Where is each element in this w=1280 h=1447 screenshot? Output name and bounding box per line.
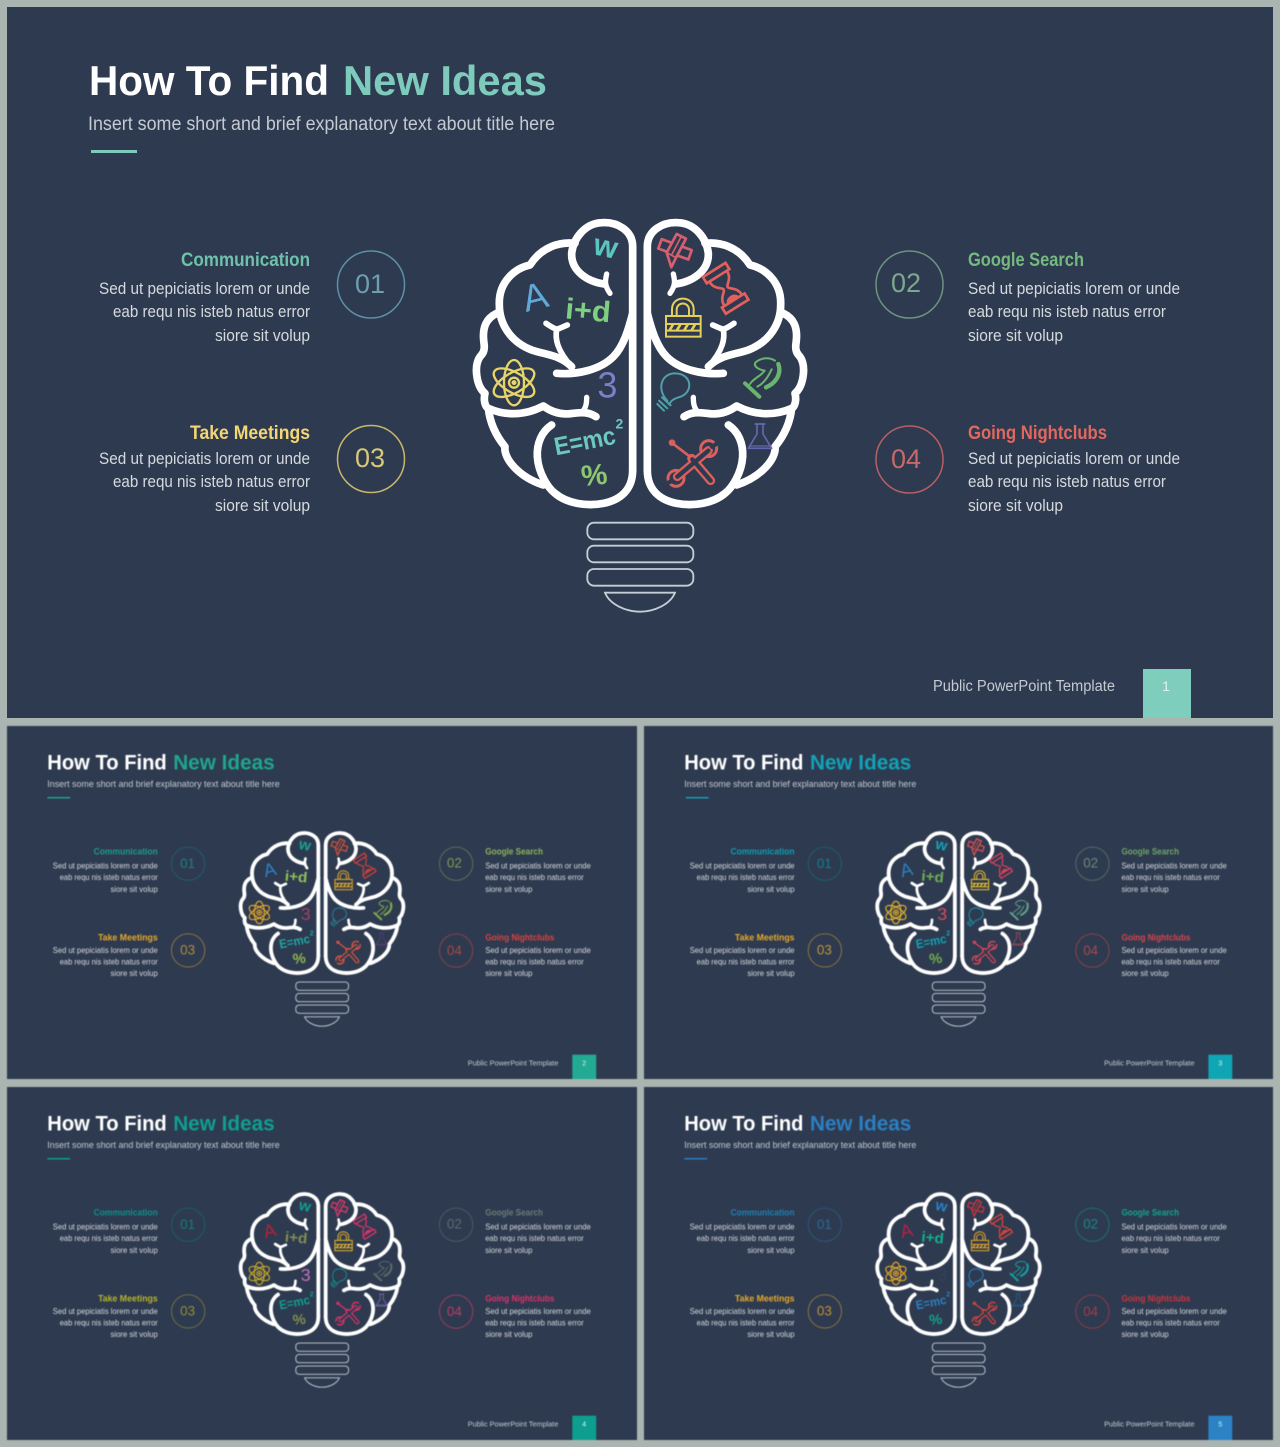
item 01: Communication: Communication	[730, 847, 795, 858]
item 04: Going Nightclubs: Sed ut pepiciatis lorem or unde	[485, 1307, 591, 1316]
panel: slide 2	[7, 726, 637, 1079]
number badge 02	[1076, 847, 1109, 880]
panel: slide 5	[644, 1087, 1273, 1440]
title: How To Find	[47, 1113, 167, 1136]
item 03: Take Meetings: siore sit volup	[215, 497, 310, 515]
number badge 03: 03	[355, 443, 385, 473]
number badge 01: 01	[180, 856, 195, 871]
item 03: Take Meetings	[690, 932, 795, 978]
title underline	[47, 1158, 70, 1159]
number badge 04	[876, 426, 943, 493]
item 03: Take Meetings: eab requ nis isteb natus error	[60, 1318, 158, 1327]
item 03: Take Meetings: Take Meetings	[98, 1293, 158, 1304]
item 03: Take Meetings: Take Meetings	[190, 423, 310, 444]
brain light bulb illustration: %	[292, 951, 307, 968]
subtitle: Insert some short and brief explanatory text about title here	[47, 1140, 280, 1151]
item 04: Going Nightclubs	[485, 1293, 591, 1339]
brain light bulb illustration	[241, 1194, 403, 1387]
page number tile	[1208, 1055, 1232, 1079]
number badge 03	[808, 934, 841, 967]
item 03: Take Meetings	[53, 1293, 158, 1339]
brain light bulb illustration	[877, 1194, 1040, 1387]
number badge 01	[171, 1208, 205, 1241]
item 03: Take Meetings: siore sit volup	[111, 969, 158, 978]
item 01: Communication: Sed ut pepiciatis lorem or unde	[690, 1222, 795, 1231]
brain light bulb illustration: A	[898, 858, 915, 881]
page number tile: 5	[1218, 1422, 1222, 1429]
number badge 04: 04	[447, 1304, 462, 1319]
brain light bulb illustration: E=mc	[278, 1293, 311, 1313]
item 01: Communication: eab requ nis isteb natus error	[113, 303, 310, 321]
item 02: Google Search: Sed ut pepiciatis lorem or unde	[1121, 1222, 1227, 1231]
brain light bulb illustration: 2	[946, 1291, 950, 1298]
title: New Ideas	[173, 752, 275, 775]
brain light bulb illustration	[877, 833, 1040, 1026]
title	[684, 752, 911, 775]
number badge 02: 02	[1083, 856, 1098, 870]
brain light bulb illustration: 3	[937, 1265, 947, 1285]
item 03: Take Meetings: eab requ nis isteb natus error	[60, 957, 158, 966]
item 02: Google Search	[968, 250, 1180, 345]
item 04: Going Nightclubs: Going Nightclubs	[485, 1293, 554, 1304]
number badge 02	[1076, 1208, 1109, 1241]
item 01: Communication: Sed ut pepiciatis lorem or unde	[53, 861, 158, 870]
item 01: Communication: eab requ nis isteb natus error	[60, 873, 158, 882]
item 04: Going Nightclubs: eab requ nis isteb natus error	[968, 473, 1166, 491]
brain light bulb illustration: 2	[310, 1291, 314, 1298]
item 03: Take Meetings	[53, 932, 158, 978]
item 04: Going Nightclubs: Sed ut pepiciatis lorem or unde	[968, 450, 1180, 468]
brain light bulb illustration: i+d	[921, 869, 945, 887]
footer label: Public PowerPoint Template	[468, 1420, 558, 1429]
item 01: Communication: Sed ut pepiciatis lorem or unde	[99, 280, 310, 298]
item 01: Communication: Communication	[94, 1208, 158, 1219]
brain light bulb illustration: i+d	[921, 1230, 945, 1248]
brain light bulb illustration: 3	[597, 364, 617, 405]
item 04: Going Nightclubs: Sed ut pepiciatis lorem or unde	[1121, 1307, 1227, 1316]
title	[89, 57, 547, 104]
item 04: Going Nightclubs: siore sit volup	[485, 969, 533, 978]
title: New Ideas	[810, 1113, 911, 1136]
brain light bulb illustration	[476, 223, 804, 612]
item 04: Going Nightclubs: Going Nightclubs	[485, 932, 554, 943]
item 02: Google Search: siore sit volup	[485, 1246, 533, 1255]
number badge 03: 03	[180, 942, 195, 957]
title	[47, 1113, 275, 1136]
item 02: Google Search: eab requ nis isteb natus error	[968, 303, 1166, 321]
item 04: Going Nightclubs: eab requ nis isteb natus error	[1121, 1318, 1220, 1327]
item 02: Google Search: siore sit volup	[485, 885, 533, 894]
number badge 04	[1076, 1295, 1109, 1328]
footer label: Public PowerPoint Template	[933, 678, 1115, 695]
number badge 04: 04	[1083, 1304, 1099, 1319]
item 01: Communication: Sed ut pepiciatis lorem or unde	[53, 1222, 158, 1231]
item 01: Communication: siore sit volup	[111, 885, 158, 894]
item 02: Google Search: siore sit volup	[968, 327, 1063, 345]
item 04: Going Nightclubs: eab requ nis isteb natus error	[485, 1318, 584, 1327]
item 01: Communication: Communication	[730, 1208, 795, 1219]
footer label: Public PowerPoint Template	[1104, 1059, 1194, 1068]
number badge 01	[808, 847, 841, 880]
title: New Ideas	[810, 752, 911, 775]
item 01: Communication: siore sit volup	[747, 1246, 795, 1255]
brain light bulb illustration: %	[929, 951, 943, 968]
item 02: Google Search: Sed ut pepiciatis lorem or unde	[1121, 861, 1227, 870]
title underline	[684, 1158, 707, 1159]
title: How To Find	[89, 57, 329, 104]
item 02: Google Search: eab requ nis isteb natus error	[485, 873, 584, 882]
brain light bulb illustration: E=mc	[915, 932, 948, 952]
item 03: Take Meetings: eab requ nis isteb natus error	[113, 473, 310, 491]
number badge 01: 01	[355, 269, 385, 299]
brain light bulb illustration: i+d	[284, 869, 308, 887]
item 01: Communication: siore sit volup	[111, 1246, 158, 1255]
item 04: Going Nightclubs: Sed ut pepiciatis lorem or unde	[485, 946, 591, 955]
item 01: Communication: Communication	[181, 250, 310, 271]
page number tile	[572, 1055, 596, 1079]
subtitle: Insert some short and brief explanatory text about title here	[47, 779, 280, 790]
item 02: Google Search	[1121, 1208, 1227, 1255]
item 01: Communication	[53, 1208, 158, 1255]
brain light bulb illustration: w	[296, 1197, 313, 1216]
brain light bulb illustration: 3	[301, 1265, 311, 1285]
item 02: Google Search: Sed ut pepiciatis lorem or unde	[485, 861, 591, 870]
number badge 03	[171, 934, 205, 967]
title: New Ideas	[173, 1113, 275, 1136]
brain light bulb illustration: %	[292, 1312, 307, 1329]
number badge 01: 01	[817, 1217, 832, 1232]
brain light bulb illustration: i+d	[564, 292, 612, 329]
brain light bulb illustration: %	[929, 1312, 943, 1329]
brain light bulb illustration: A	[518, 273, 552, 320]
brain light bulb illustration: 2	[946, 930, 950, 937]
number badge 01	[808, 1208, 841, 1241]
item 01: Communication: eab requ nis isteb natus error	[697, 873, 795, 882]
item 01: Communication: Communication	[94, 847, 158, 858]
item 04: Going Nightclubs: Going Nightclubs	[1121, 1293, 1191, 1304]
item 02: Google Search: eab requ nis isteb natus error	[485, 1234, 584, 1243]
item 01: Communication: eab requ nis isteb natus error	[60, 1234, 158, 1243]
title	[47, 752, 275, 775]
title: New Ideas	[343, 57, 547, 104]
brain light bulb illustration: E=mc	[552, 422, 618, 461]
panel: slide 3	[644, 726, 1273, 1079]
number badge 03	[808, 1295, 841, 1328]
item 03: Take Meetings: Sed ut pepiciatis lorem or unde	[53, 946, 158, 955]
number badge 02: 02	[447, 856, 462, 870]
item 02: Google Search: Google Search	[1121, 847, 1179, 858]
item 03: Take Meetings: Sed ut pepiciatis lorem or unde	[99, 450, 310, 468]
title	[684, 1113, 911, 1136]
item 04: Going Nightclubs: Sed ut pepiciatis lorem or unde	[1121, 946, 1227, 955]
item 03: Take Meetings: Take Meetings	[98, 932, 158, 943]
item 04: Going Nightclubs	[485, 932, 591, 978]
brain light bulb illustration: w	[590, 227, 621, 266]
item 04: Going Nightclubs: siore sit volup	[485, 1330, 533, 1339]
number badge 04	[439, 934, 473, 967]
number badge 02	[439, 847, 473, 880]
item 02: Google Search: siore sit volup	[1121, 1246, 1169, 1255]
subtitle: Insert some short and brief explanatory text about title here	[88, 114, 555, 135]
item 04: Going Nightclubs	[1121, 932, 1227, 978]
item 04: Going Nightclubs: Going Nightclubs	[1121, 932, 1191, 943]
item 01: Communication: siore sit volup	[215, 327, 310, 345]
brain light bulb illustration: 2	[310, 930, 314, 937]
number badge 03: 03	[817, 942, 832, 957]
item 03: Take Meetings: eab requ nis isteb natus error	[697, 957, 795, 966]
brain light bulb illustration: A	[261, 858, 279, 881]
title underline	[686, 797, 709, 798]
number badge 01: 01	[817, 856, 832, 871]
subtitle: Insert some short and brief explanatory text about title here	[684, 779, 916, 790]
number badge 02	[876, 251, 943, 318]
item 04: Going Nightclubs: eab requ nis isteb natus error	[485, 957, 584, 966]
item 02: Google Search: Google Search	[968, 250, 1084, 271]
item 02: Google Search: eab requ nis isteb natus error	[1121, 1234, 1220, 1243]
item 03: Take Meetings: Take Meetings	[735, 932, 795, 943]
brain light bulb illustration: w	[933, 1197, 949, 1216]
page number tile	[572, 1416, 596, 1440]
item 02: Google Search: Google Search	[485, 1208, 543, 1219]
item 04: Going Nightclubs: Going Nightclubs	[968, 423, 1107, 444]
item 04: Going Nightclubs: eab requ nis isteb natus error	[1121, 957, 1220, 966]
item 01: Communication: siore sit volup	[747, 885, 795, 894]
brain light bulb illustration: A	[261, 1219, 279, 1242]
number badge 03	[338, 426, 404, 492]
item 03: Take Meetings: Sed ut pepiciatis lorem or unde	[690, 946, 795, 955]
brain light bulb illustration: A	[898, 1219, 915, 1242]
number badge 04	[1076, 934, 1109, 967]
title: How To Find	[47, 752, 167, 775]
item 04: Going Nightclubs: siore sit volup	[968, 497, 1063, 515]
number badge 01	[171, 847, 205, 880]
number badge 03: 03	[817, 1303, 832, 1318]
page number tile	[1208, 1416, 1232, 1440]
panel: main slide 1	[7, 7, 1273, 718]
item 03: Take Meetings	[99, 423, 310, 515]
item 01: Communication: eab requ nis isteb natus error	[697, 1234, 795, 1243]
brain light bulb illustration: w	[296, 836, 313, 855]
number badge 04	[439, 1295, 473, 1328]
panel: slide 4	[7, 1087, 637, 1440]
number badge 02: 02	[1083, 1217, 1098, 1231]
item 03: Take Meetings: siore sit volup	[747, 1330, 795, 1339]
item 03: Take Meetings: Sed ut pepiciatis lorem or unde	[53, 1307, 158, 1316]
item 04: Going Nightclubs: siore sit volup	[1121, 1330, 1169, 1339]
number badge 03	[171, 1295, 205, 1328]
item 02: Google Search	[485, 847, 591, 894]
item 02: Google Search: Sed ut pepiciatis lorem or unde	[485, 1222, 591, 1231]
item 01: Communication	[690, 1208, 795, 1255]
item 02: Google Search	[485, 1208, 591, 1255]
page number tile: 1	[1162, 678, 1170, 694]
footer label: Public PowerPoint Template	[1104, 1420, 1194, 1429]
item 03: Take Meetings: Sed ut pepiciatis lorem or unde	[690, 1307, 795, 1316]
item 02: Google Search	[1121, 847, 1227, 894]
brain light bulb illustration	[241, 833, 403, 1026]
brain light bulb illustration: E=mc	[915, 1293, 948, 1313]
brain light bulb illustration: w	[933, 836, 949, 855]
number badge 01	[338, 251, 404, 318]
item 02: Google Search: Google Search	[1121, 1208, 1179, 1219]
number badge 01: 01	[180, 1217, 195, 1232]
title underline	[91, 150, 137, 153]
number badge 02: 02	[447, 1217, 462, 1231]
number badge 02: 02	[891, 268, 921, 298]
page number tile: 3	[1218, 1061, 1222, 1068]
number badge 03: 03	[180, 1303, 195, 1318]
item 02: Google Search: siore sit volup	[1121, 885, 1169, 894]
number badge 04: 04	[891, 444, 921, 474]
brain light bulb illustration: 3	[301, 904, 311, 924]
brain light bulb illustration: 2	[615, 416, 623, 432]
item 03: Take Meetings: Take Meetings	[735, 1293, 795, 1304]
brain light bulb illustration: %	[580, 458, 609, 493]
title: How To Find	[684, 752, 803, 775]
item 03: Take Meetings: siore sit volup	[747, 969, 795, 978]
item 04: Going Nightclubs	[1121, 1293, 1227, 1339]
number badge 04: 04	[1083, 943, 1099, 958]
brain light bulb illustration: i+d	[284, 1230, 308, 1248]
item 03: Take Meetings	[690, 1293, 795, 1339]
item 04: Going Nightclubs: siore sit volup	[1121, 969, 1169, 978]
number badge 02	[439, 1208, 473, 1241]
item 01: Communication: Sed ut pepiciatis lorem or unde	[690, 861, 795, 870]
page number tile: 2	[582, 1061, 586, 1068]
item 01: Communication	[99, 250, 310, 345]
item 02: Google Search: eab requ nis isteb natus error	[1121, 873, 1220, 882]
title: How To Find	[684, 1113, 803, 1136]
brain light bulb illustration: E=mc	[278, 932, 311, 952]
item 02: Google Search: Google Search	[485, 847, 543, 858]
item 02: Google Search: Sed ut pepiciatis lorem or unde	[968, 280, 1180, 298]
page number tile: 4	[582, 1422, 586, 1429]
brain light bulb illustration: 3	[937, 904, 947, 924]
item 03: Take Meetings: siore sit volup	[111, 1330, 158, 1339]
item 01: Communication	[690, 847, 795, 894]
item 04: Going Nightclubs	[968, 423, 1180, 515]
item 03: Take Meetings: eab requ nis isteb natus error	[697, 1318, 795, 1327]
subtitle: Insert some short and brief explanatory text about title here	[684, 1140, 916, 1151]
number badge 04: 04	[447, 943, 462, 958]
item 01: Communication	[53, 847, 158, 894]
title underline	[47, 797, 70, 798]
page number tile	[1143, 669, 1191, 718]
footer label: Public PowerPoint Template	[468, 1059, 558, 1068]
